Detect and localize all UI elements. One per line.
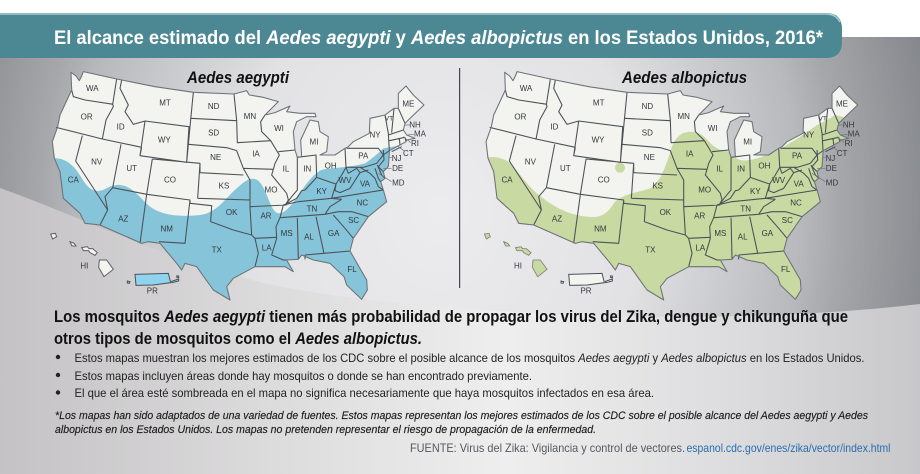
shaded range: aegypti bbox=[54, 146, 398, 299]
state labels: MD bbox=[392, 178, 405, 187]
state labels: NH bbox=[843, 120, 855, 129]
state labels: PA bbox=[792, 151, 803, 160]
state labels: WI bbox=[708, 124, 718, 133]
state labels: AZ bbox=[118, 215, 129, 224]
bullet list: Estos mapas muestran los mejores estimados de los CDC sobre el posible alcance de los mosquitos Aedes aegypti y Aedes albopictus en los Estados Unidos. bbox=[74, 351, 864, 365]
state labels: NC bbox=[790, 199, 802, 208]
state labels: ME bbox=[836, 100, 848, 109]
state labels: CT bbox=[403, 149, 414, 158]
shaded range: albopictus bbox=[488, 115, 847, 299]
state labels: IN bbox=[303, 165, 312, 174]
state labels: KS bbox=[219, 182, 229, 191]
divider between maps bbox=[459, 68, 460, 288]
state labels: RI bbox=[411, 139, 419, 148]
state labels: UT bbox=[560, 164, 571, 173]
footnote: albopictus en los Estados Unidos. Los mapas no pretenden representar el riesgo de propagación de la enfermedad. bbox=[55, 424, 596, 436]
state labels: MT bbox=[593, 99, 605, 108]
icon: Puerto Rico bbox=[561, 273, 612, 285]
state labels: MA bbox=[414, 129, 427, 138]
state labels: OH bbox=[325, 162, 337, 171]
state labels: IA bbox=[252, 150, 260, 159]
state labels: MI bbox=[743, 137, 752, 146]
title text: El alcance estimado del Aedes aegypti y Aedes albopictus en los Estados Unidos, 2016* bbox=[54, 28, 824, 49]
key message heading: otros tipos de mosquitos como el Aedes albopictus. bbox=[54, 330, 422, 348]
state labels: PA bbox=[358, 151, 369, 160]
state labels: VA bbox=[360, 180, 371, 189]
state labels bbox=[501, 84, 860, 295]
state labels: NH bbox=[409, 120, 421, 129]
state labels: DE bbox=[826, 164, 837, 173]
map title: Aedes aegypti: Aedes aegypti bbox=[186, 68, 290, 87]
state labels: NM bbox=[594, 225, 607, 234]
state labels: MA bbox=[848, 129, 860, 138]
state labels: HI bbox=[80, 261, 88, 270]
map: Aedes albopictus range bbox=[480, 72, 874, 313]
state labels: SD bbox=[642, 129, 653, 138]
state labels: NJ bbox=[825, 154, 835, 163]
bullet list: El que el área esté sombreada en el mapa no significa necesariamente que haya mosquitos infectados en esa área. bbox=[74, 386, 654, 400]
state labels: RI bbox=[845, 139, 853, 148]
state labels: CA bbox=[501, 176, 513, 185]
state labels: IL bbox=[283, 165, 290, 174]
state labels: VT bbox=[385, 115, 393, 122]
state labels: OK bbox=[660, 208, 672, 217]
state labels: OK bbox=[226, 208, 238, 217]
state labels: TN bbox=[307, 205, 318, 214]
state labels: NM bbox=[160, 225, 173, 234]
state labels: ND bbox=[642, 102, 653, 111]
state labels: AL bbox=[738, 233, 748, 242]
state labels: SC bbox=[348, 216, 359, 225]
source line: FUENTE: Virus del Zika: Vigilancia y control de vectores. bbox=[410, 441, 685, 455]
state labels: NE bbox=[644, 153, 655, 162]
state labels: TX bbox=[645, 245, 656, 254]
state labels: PR bbox=[580, 286, 592, 295]
footnote: *Los mapas han sido adaptados de una variedad de fuentes. Estos mapas representan los mejores estimados de los CDC sobre el posible alcance del Aedes aegypti y Aedes bbox=[55, 410, 868, 422]
state labels: CO bbox=[164, 176, 176, 185]
bullet list: Estos mapas incluyen áreas donde hay mosquitos o donde se han encontrado previamente. bbox=[74, 369, 532, 383]
icon: Hawaii bbox=[51, 233, 113, 277]
state labels: TN bbox=[740, 205, 751, 214]
state labels: WA bbox=[86, 84, 99, 93]
state labels: AR bbox=[260, 212, 272, 221]
state labels: IL bbox=[716, 165, 724, 174]
state labels: WV bbox=[339, 176, 352, 185]
state labels: KY bbox=[316, 187, 328, 196]
bullet list bbox=[56, 351, 865, 400]
state labels: SC bbox=[782, 216, 793, 225]
state labels: NC bbox=[357, 199, 368, 208]
state labels: OH bbox=[758, 162, 771, 171]
map: Aedes aegypti range bbox=[47, 72, 440, 313]
state labels: NY bbox=[369, 131, 381, 140]
state labels: OR bbox=[81, 112, 93, 121]
state labels: WV bbox=[772, 176, 786, 185]
state labels: LA bbox=[262, 244, 272, 253]
state labels: NV bbox=[525, 157, 537, 166]
state labels: MS bbox=[714, 229, 726, 238]
state labels: VA bbox=[794, 180, 804, 189]
state labels: WI bbox=[274, 124, 284, 133]
state labels: KY bbox=[750, 187, 761, 196]
state labels: MO bbox=[698, 185, 711, 194]
state labels: WY bbox=[158, 136, 171, 145]
title banner bbox=[0, 13, 842, 58]
key message heading: Los mosquitos Aedes aegypti tienen más probabilidad de propagar los virus del Zika, dengue y chikunguña que bbox=[54, 308, 848, 326]
state labels: ID bbox=[550, 123, 559, 132]
state labels: MO bbox=[265, 185, 277, 194]
icon: Hawaii bbox=[484, 233, 547, 277]
icon: Puerto Rico bbox=[127, 273, 179, 285]
state labels: LA bbox=[695, 244, 706, 253]
state labels bbox=[68, 84, 427, 295]
state labels: CO bbox=[598, 176, 610, 185]
state labels: DE bbox=[392, 164, 403, 173]
key message heading bbox=[54, 308, 848, 348]
state labels: MS bbox=[281, 229, 293, 238]
state labels: ME bbox=[402, 100, 414, 109]
state labels: UT bbox=[126, 164, 137, 173]
state labels: MI bbox=[310, 137, 318, 146]
state labels: FL bbox=[781, 265, 791, 274]
state labels: NV bbox=[91, 157, 103, 166]
state labels: SD bbox=[208, 129, 219, 138]
state labels: WY bbox=[592, 136, 605, 145]
state labels: PR bbox=[147, 286, 158, 295]
state labels: GA bbox=[762, 229, 774, 238]
state labels: ID bbox=[117, 123, 125, 132]
state labels: AZ bbox=[552, 215, 562, 224]
state labels: CA bbox=[68, 176, 80, 185]
state labels: KS bbox=[652, 182, 663, 191]
state labels: FL bbox=[347, 265, 357, 274]
state labels: IA bbox=[686, 150, 694, 159]
shaded spot: Colorado bbox=[615, 163, 625, 173]
state labels: HI bbox=[514, 261, 522, 270]
state labels: NJ bbox=[392, 154, 402, 163]
state labels: MN bbox=[244, 112, 256, 121]
state labels: OR bbox=[514, 112, 527, 121]
state labels: ND bbox=[208, 102, 220, 111]
state labels: AL bbox=[304, 233, 314, 242]
footnote bbox=[55, 410, 868, 436]
callout leader lines bbox=[812, 125, 848, 182]
state labels: MD bbox=[826, 178, 838, 187]
map title: Aedes albopictus: Aedes albopictus bbox=[621, 68, 747, 87]
state labels: VT bbox=[818, 115, 827, 122]
state labels: AR bbox=[694, 212, 705, 221]
state labels: IN bbox=[737, 165, 745, 174]
source line bbox=[410, 441, 890, 455]
state labels: MT bbox=[159, 99, 171, 108]
state labels: GA bbox=[328, 229, 340, 238]
callout leader lines bbox=[378, 125, 414, 182]
state labels: NY bbox=[803, 131, 815, 140]
source line: espanol.cdc.gov/enes/zika/vector/index.html bbox=[686, 441, 890, 455]
state labels: WA bbox=[520, 84, 533, 93]
state labels: TX bbox=[212, 245, 222, 254]
state labels: NE bbox=[210, 153, 221, 162]
state labels: CT bbox=[837, 149, 847, 158]
state labels: MN bbox=[677, 112, 690, 121]
